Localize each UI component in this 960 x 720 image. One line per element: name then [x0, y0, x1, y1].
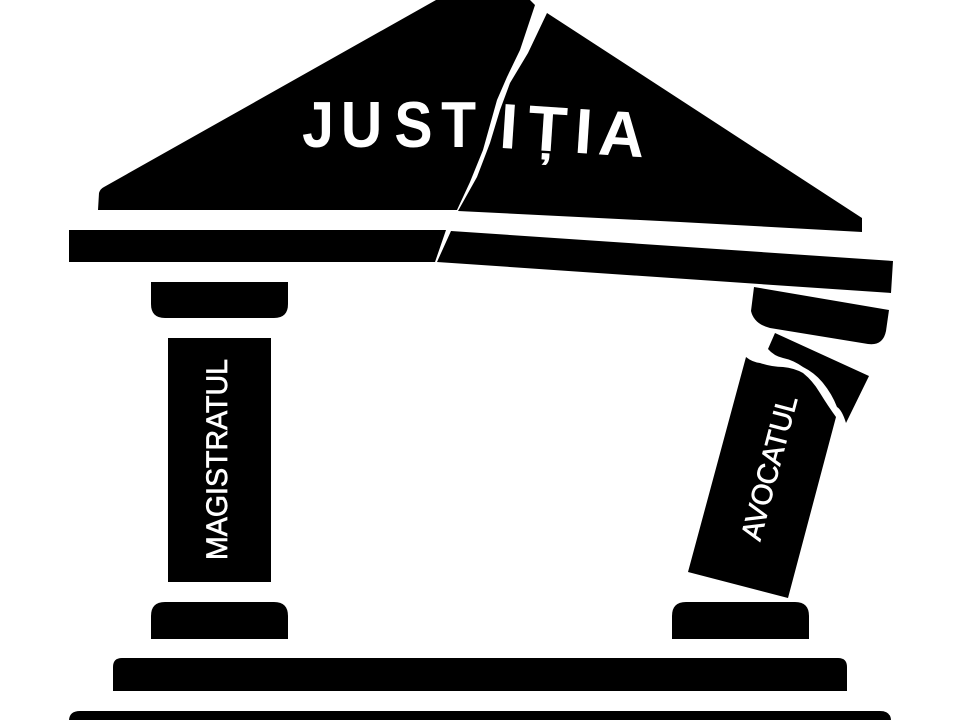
right column base	[672, 602, 809, 639]
roof: left fragment	[98, 0, 535, 210]
roof title: JUSTIȚIA: JUST	[302, 89, 476, 161]
left column base	[151, 602, 288, 639]
label: MAGISTRATUL: MAGISTRATUL	[201, 359, 234, 560]
label: AVOCATUL: AVOCATUL	[736, 393, 804, 544]
roof: right fragment	[458, 13, 862, 232]
left column capital	[151, 282, 288, 318]
right column shaft: avocatul	[688, 357, 836, 598]
entablature beam: right fragment	[437, 231, 893, 293]
roof title: JUSTIȚIA: IȚIA	[498, 90, 647, 172]
temple upper step	[113, 658, 847, 691]
right column capital, tilted	[751, 287, 889, 344]
temple lower step	[69, 711, 891, 720]
left column shaft: magistratul	[168, 338, 271, 582]
right column broken fragment	[768, 333, 869, 423]
roof title: JUSTIȚIA	[302, 89, 647, 172]
entablature beam: left fragment	[69, 230, 446, 262]
